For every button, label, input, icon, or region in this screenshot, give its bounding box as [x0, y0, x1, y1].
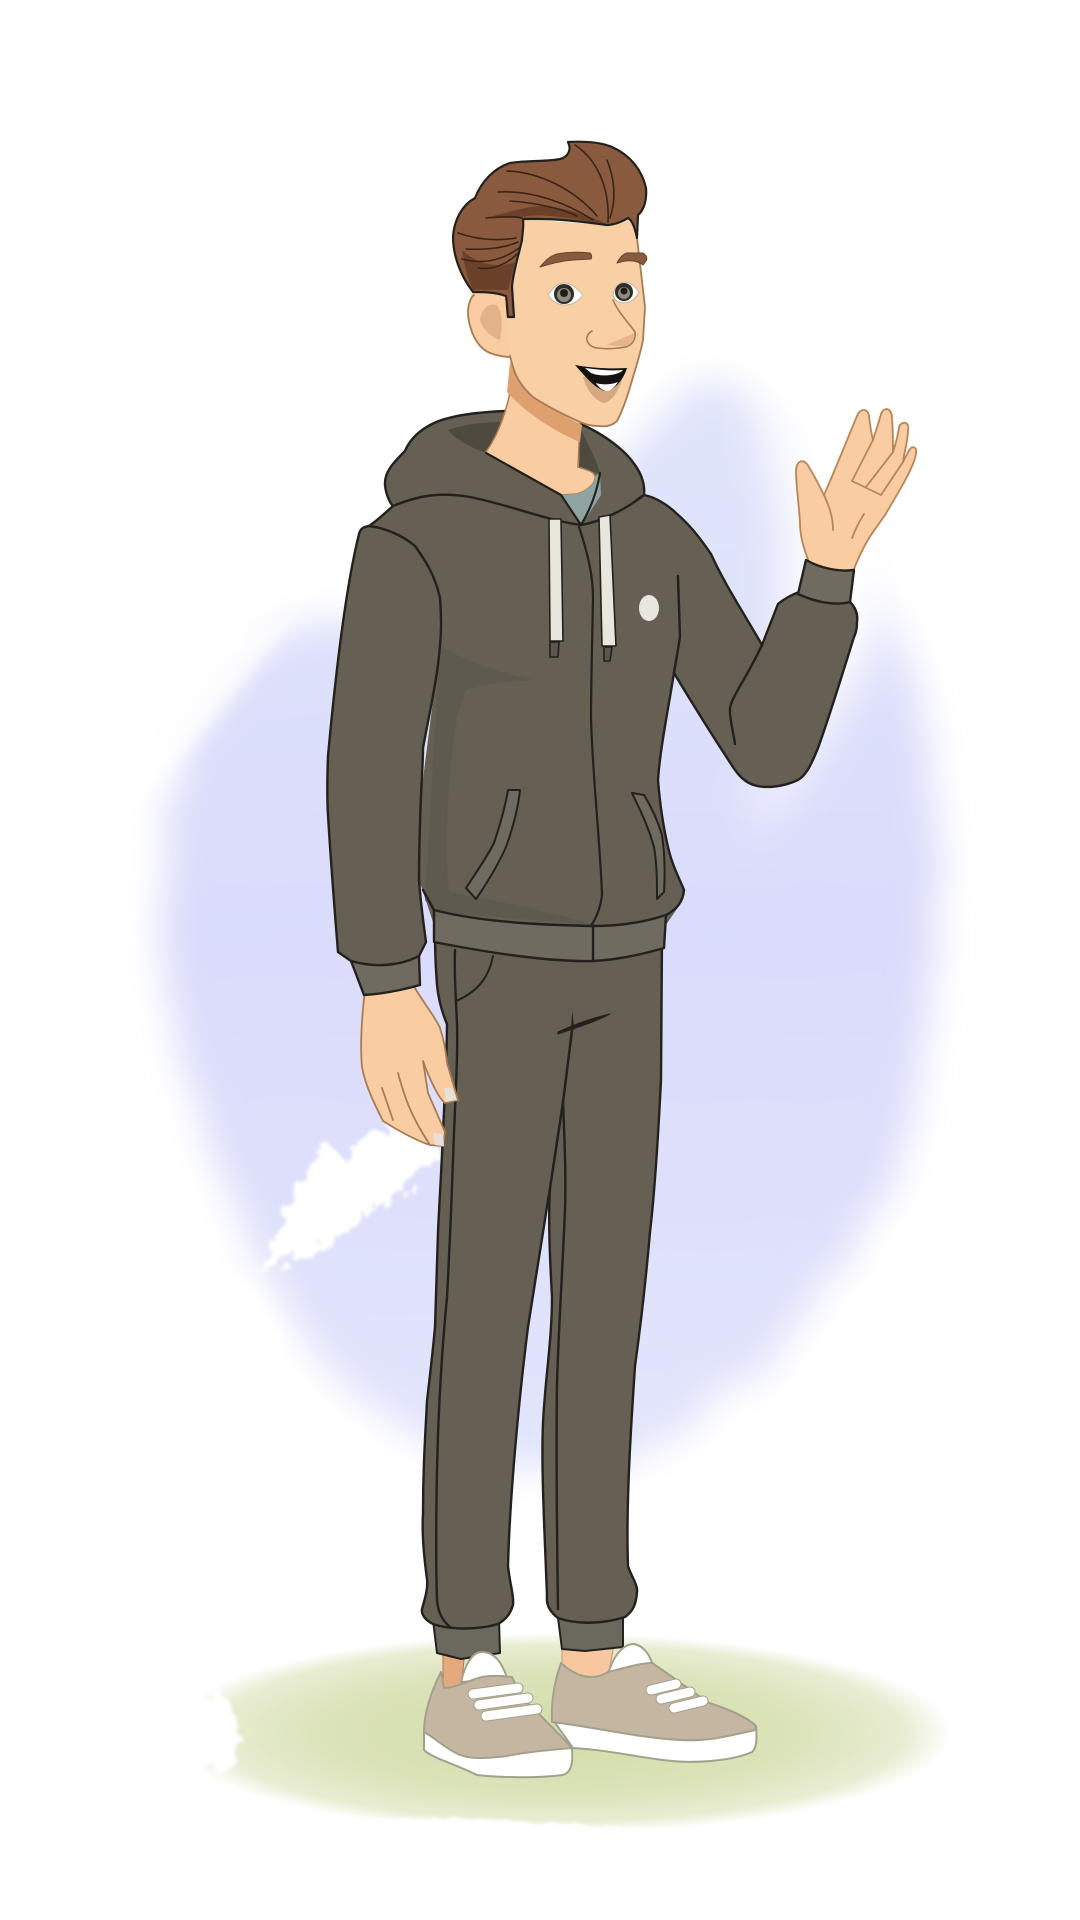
left sleeve — [327, 526, 441, 965]
hoodie body — [369, 495, 762, 935]
right pocket — [632, 793, 665, 899]
raised arm — [644, 495, 857, 787]
background: lavender watercolor wash — [120, 383, 937, 1480]
hair shadow — [462, 206, 607, 290]
trousers — [422, 930, 662, 1628]
torso left hem outline — [423, 890, 434, 910]
badge — [639, 595, 659, 621]
chest seam — [674, 576, 680, 673]
neck — [485, 362, 595, 495]
hair — [453, 142, 646, 317]
front leg — [422, 935, 580, 1628]
left pocket — [466, 790, 520, 899]
drawstring right — [599, 515, 616, 661]
background: white highlight upper right — [750, 410, 900, 850]
right ankle and cuff — [558, 1614, 623, 1680]
ground: white brush cut bottom — [250, 1818, 820, 1880]
hood back — [385, 411, 644, 536]
eyebrows — [540, 252, 592, 267]
ground: green grass patch — [165, 1633, 952, 1880]
hoodie — [327, 453, 857, 995]
face — [505, 215, 645, 426]
drawstring left — [549, 519, 563, 657]
t-shirt — [561, 473, 601, 526]
nose — [587, 300, 635, 349]
left shoe laces — [473, 1688, 537, 1716]
ground: white brush cut left — [165, 1695, 238, 1772]
background: white outside lower left — [120, 1230, 300, 1460]
fingernails — [444, 1088, 457, 1102]
left shoe — [424, 1652, 572, 1777]
eye left — [548, 283, 583, 305]
right shoe — [552, 1644, 757, 1762]
raised hand — [796, 409, 916, 573]
left sleeve cuff — [351, 956, 420, 995]
torso shading — [425, 645, 596, 925]
hair strands — [458, 145, 614, 268]
head — [453, 142, 647, 426]
mouth — [575, 365, 627, 391]
hood inner shadow left — [448, 422, 500, 453]
trouser seams — [436, 950, 565, 1627]
face outline — [510, 238, 645, 426]
raised arm cuff — [798, 560, 854, 604]
chin shadow — [583, 377, 622, 403]
background: white highlight lower left — [130, 610, 300, 800]
crotch fill patch — [565, 930, 600, 1028]
ear — [468, 290, 520, 357]
hood inner shadow right — [579, 424, 600, 473]
zip — [579, 527, 602, 926]
hem band — [434, 910, 666, 961]
back leg — [542, 935, 662, 1623]
figure: man — [327, 142, 916, 1777]
hood front line — [369, 495, 644, 526]
right shoe laces — [651, 1684, 703, 1708]
eye right — [613, 282, 639, 303]
lower hand — [361, 985, 458, 1146]
background: white brush stroke lower left — [258, 1130, 440, 1275]
torso right outline — [658, 576, 684, 915]
left ankle and cuff — [433, 1620, 500, 1690]
